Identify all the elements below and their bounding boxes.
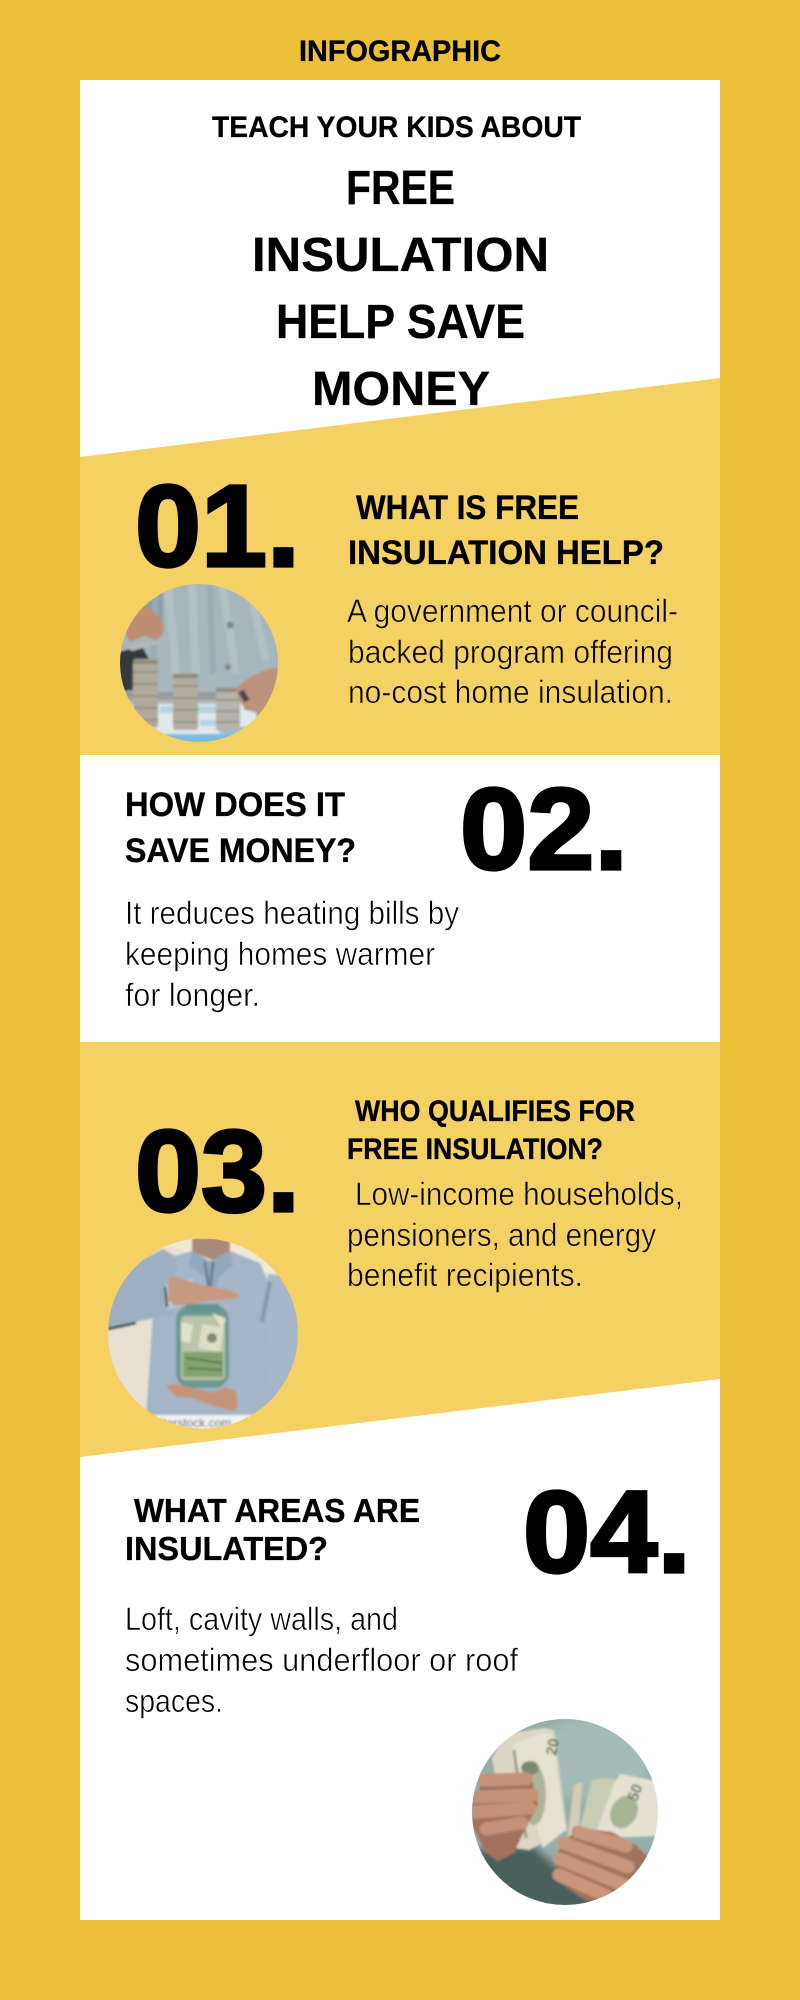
- photo: hands holding dollar bills: [472, 1719, 658, 1905]
- body text 02: It reduces heating bills by: [125, 895, 459, 931]
- panel: white card: [80, 80, 720, 1920]
- body text 02: for longer.: [125, 977, 260, 1013]
- main title: HELP SAVE: [276, 296, 525, 349]
- photo: hands holding dollar bills: 20: [543, 1737, 563, 1757]
- photo: man holding jar of money: tterstock.com · 451082: [160, 1416, 282, 1430]
- heading: who qualifies: WHO QUALIFIES FOR: [355, 1095, 635, 1128]
- body text 03: benefit recipients.: [347, 1257, 583, 1293]
- heading: what areas are insulated: INSULATED?: [125, 1530, 328, 1567]
- body text 04: spaces.: [125, 1683, 223, 1719]
- body text 01: backed program offering: [348, 634, 673, 670]
- panel: title block: [212, 111, 581, 416]
- section 01 background: [80, 378, 720, 755]
- body text 01: A government or council-: [347, 593, 678, 629]
- heading: how does it save money: [125, 786, 356, 870]
- section 03 background: [80, 1042, 720, 1457]
- body text 01: [347, 593, 678, 710]
- heading: what is free insulation help: INSULATION HELP?: [348, 534, 664, 572]
- body text 04: Loft, cavity walls, and: [125, 1601, 398, 1637]
- body text 03: Low-income households,: [355, 1176, 683, 1212]
- panel: section 03: [80, 1042, 720, 1457]
- main title: INSULATION: [252, 229, 549, 282]
- photo: hands stacking coins: [118, 582, 280, 744]
- heading: what areas are insulated: [125, 1492, 420, 1567]
- main title: [252, 162, 549, 416]
- photo: man holding jar of money: [108, 1238, 298, 1428]
- heading: who qualifies: FREE INSULATION?: [347, 1133, 603, 1166]
- top label: infographic: INFOGRAPHIC: [299, 35, 501, 68]
- body text 02: [125, 895, 459, 1013]
- panel: section 02: [125, 764, 628, 1013]
- photo: hands holding dollar bills: 50: [625, 1782, 646, 1803]
- panel: section 01: [80, 378, 720, 755]
- heading: what is free insulation help: [348, 489, 664, 572]
- body text 04: sometimes underfloor or roof: [125, 1642, 518, 1678]
- number 04: 04.: [523, 1467, 691, 1597]
- number 02: 02.: [460, 764, 628, 894]
- body text 01: no-cost home insulation.: [348, 674, 673, 710]
- body text 03: [347, 1176, 683, 1293]
- heading: what is free insulation help: WHAT IS FREE: [356, 489, 579, 527]
- body text 02: keeping homes warmer: [125, 936, 435, 972]
- body text 04: [125, 1601, 518, 1719]
- subtitle: TEACH YOUR KIDS ABOUT: [212, 111, 581, 144]
- heading: how does it save money: SAVE MONEY?: [125, 832, 356, 870]
- heading: how does it save money: HOW DOES IT: [125, 786, 345, 824]
- main title: MONEY: [312, 363, 490, 416]
- heading: who qualifies: [347, 1095, 635, 1166]
- body text 03: pensioners, and energy: [347, 1217, 656, 1253]
- number 01: 01.: [135, 461, 300, 591]
- number 03: 03.: [135, 1106, 300, 1236]
- main title: FREE: [346, 162, 455, 215]
- panel: section 04: [125, 1467, 691, 1910]
- heading: what areas are insulated: WHAT AREAS ARE: [134, 1492, 420, 1529]
